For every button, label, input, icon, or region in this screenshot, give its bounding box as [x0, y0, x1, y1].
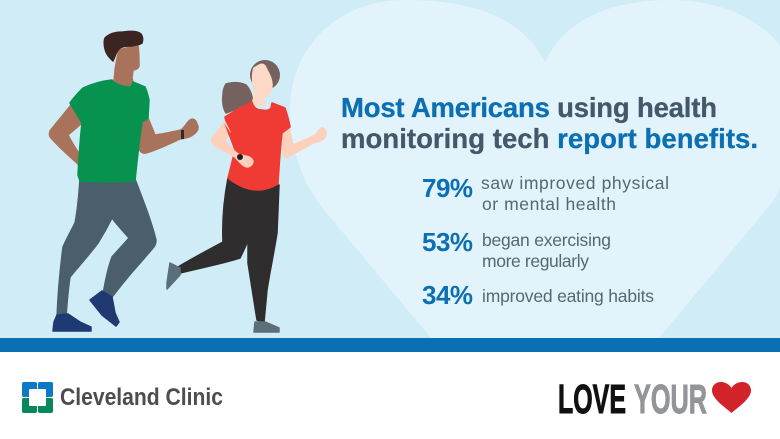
logo: Love Your Heart: YOUR [634, 376, 707, 422]
stat: 34%: 34% [422, 280, 473, 310]
title [341, 92, 758, 154]
logo: Cleveland Clinic: Cleveland Clinic [60, 384, 223, 411]
illustration: male runner [49, 31, 198, 331]
stat: 53%: 53% [422, 227, 473, 257]
stat: 79%: or mental health [482, 194, 616, 214]
stat: 53%: began exercising [482, 230, 611, 250]
blue band [0, 338, 780, 352]
footer panel [0, 352, 780, 439]
large background heart [290, 0, 780, 338]
illustration: female runner [167, 60, 326, 332]
icon: Cleveland Clinic cross [22, 382, 53, 413]
stat: 34%: improved eating habits [482, 286, 654, 306]
stat: 79%: saw improved physical [481, 173, 669, 193]
title: Most Americans using health [341, 92, 717, 123]
title: monitoring tech report benefits. [341, 123, 758, 154]
logo: Love Your Heart [558, 376, 751, 422]
stat: 53% [422, 227, 611, 271]
stat: 79% [422, 173, 669, 214]
stat: 79%: 79% [422, 173, 473, 203]
stat: 34% [422, 280, 654, 310]
stat: 53%: more regularly [482, 251, 589, 271]
logo: Cleveland Clinic [22, 382, 223, 413]
logo: Love Your Heart: LOVE [558, 376, 626, 422]
background panel [0, 0, 780, 338]
